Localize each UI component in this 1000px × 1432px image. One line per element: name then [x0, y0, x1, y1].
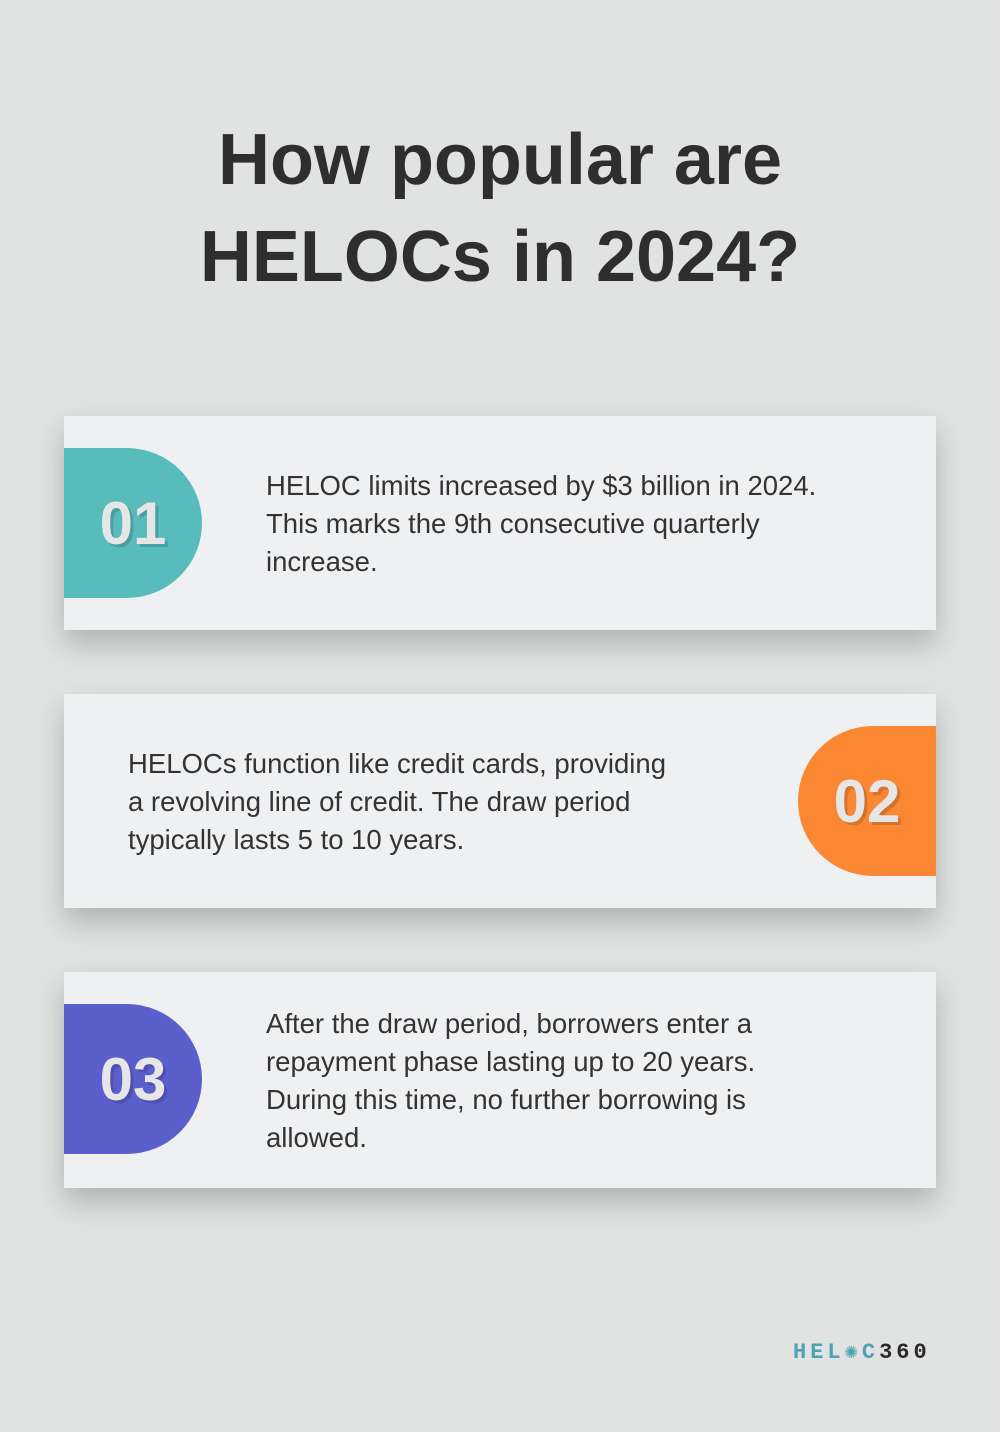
text 3: During this time, no further borrowing is — [266, 1084, 746, 1115]
text 2 — [128, 748, 666, 855]
text 1: increase. — [266, 546, 378, 577]
badge 01 — [64, 448, 202, 598]
logo: HEL✺C360 — [793, 1340, 931, 1365]
panel: card 1 — [64, 416, 936, 630]
badge 03 — [64, 1004, 202, 1154]
text 3: repayment phase lasting up to 20 years. — [266, 1046, 755, 1077]
title: HELOCs in 2024? — [200, 217, 800, 297]
badge 01: 01 — [100, 490, 166, 556]
text 1 — [266, 470, 816, 577]
badge 02 — [798, 726, 936, 876]
text 2: HELOCs function like credit cards, providing — [128, 748, 666, 779]
panel: card 2 — [64, 694, 936, 908]
panel: card 3 — [64, 972, 936, 1188]
text 3: allowed. — [266, 1122, 367, 1153]
text 1: This marks the 9th consecutive quarterly — [266, 508, 760, 539]
text 2: typically lasts 5 to 10 years. — [128, 824, 464, 855]
text 1: HELOC limits increased by $3 billion in 2024. — [266, 470, 816, 501]
title — [200, 120, 800, 297]
text 2: a revolving line of credit. The draw period — [128, 786, 630, 817]
badge 03: 03 — [100, 1046, 166, 1112]
text 3 — [266, 1008, 755, 1153]
text 3: After the draw period, borrowers enter a — [266, 1008, 752, 1039]
badge 02: 02 — [834, 768, 900, 834]
title: How popular are — [218, 120, 782, 200]
